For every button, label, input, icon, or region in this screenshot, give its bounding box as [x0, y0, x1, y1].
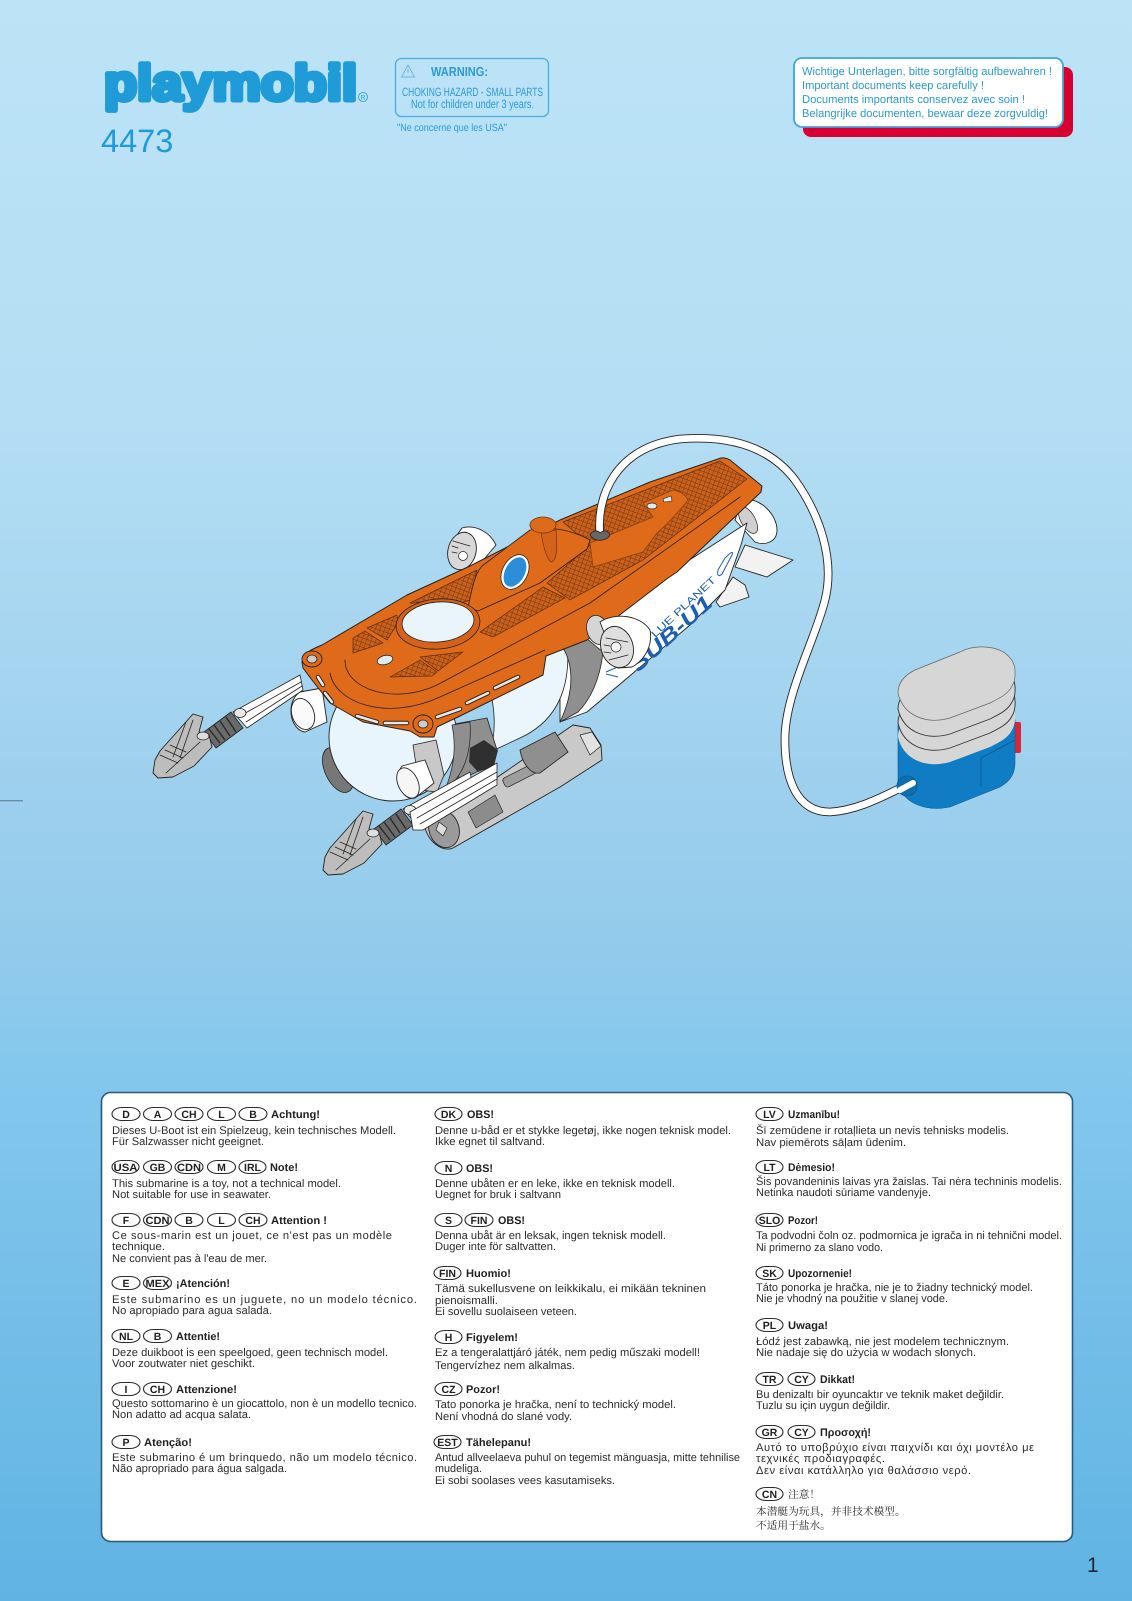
keep documents note: [794, 58, 1073, 137]
warning: Hungarian: Ez a tengeralattjáró játék, nem pedig műszaki modell!: [435, 1347, 700, 1359]
warning text: CHOKING HAZARD - SMALL PARTS: [402, 85, 543, 99]
conning tower: [468, 517, 590, 611]
warning: English: This submarine is a toy, not a technical model.: [112, 1178, 341, 1190]
warning: Hungarian: [435, 1330, 700, 1372]
warning: Lithuanian: Netinka naudoti sūriame vandenyje.: [756, 1187, 931, 1199]
tail thruster and fins: [716, 499, 793, 607]
warning: Latvian: Šī zemūdene ir rotaļlieta un nevis tehnisks modelis.: [756, 1124, 1009, 1137]
power cable: [599, 438, 905, 812]
warning: Slovenian: Ta podvodni čoln oz. podmornica je igrača in ni tehnični model.: [756, 1230, 1062, 1242]
warning: Spanish: ¡Atención!: [176, 1278, 230, 1290]
grey ring: [557, 633, 603, 722]
warning: Swedish: [435, 1214, 666, 1253]
warning: Spanish: No apropiado para agua salada.: [112, 1305, 272, 1317]
warning: Slovak: Nie je vhodný na použitie v slanej vode.: [756, 1293, 948, 1305]
warning text: Not for children under 3 years.: [411, 97, 534, 111]
warning: Slovak: [756, 1266, 1033, 1305]
periscope knob: [541, 530, 557, 562]
warning: French: [112, 1214, 392, 1265]
warning: Danish: OBS!: [467, 1109, 494, 1121]
warning: French: CDN: [146, 1215, 170, 1227]
keep documents note: Documents importants conservez avec soin !: [802, 94, 1025, 106]
warning: Hungarian: Figyelem!: [466, 1332, 518, 1344]
raised tail plate: [590, 490, 688, 567]
near arm and claw: [323, 763, 497, 875]
submarine illustration: [153, 458, 793, 875]
warning: English: Not suitable for use in seawater.: [112, 1189, 271, 1201]
warning: Estonian: mudeliga.: [435, 1463, 482, 1475]
blue base: [898, 720, 1015, 808]
warning: Latvian: Nav piemērots sāļam ūdenim.: [756, 1137, 906, 1149]
warning: Turkish: Tuzlu su için uygun değildir.: [756, 1400, 890, 1412]
warning heading: WARNING:: [431, 64, 488, 79]
warning: Portuguese: Atenção!: [144, 1437, 192, 1449]
orange deck: [302, 458, 762, 737]
warning: French: Attention !: [271, 1215, 327, 1227]
warning: Lithuanian: Šis povandeninis laivas yra žaislas. Tai nėra techninis modelis.: [756, 1175, 1062, 1188]
warning: German: D: [122, 1109, 130, 1121]
warning: Greek: τεχνικές προδιαγραφές.: [756, 1453, 885, 1465]
cable connector: [897, 776, 917, 796]
warning: French: F: [123, 1215, 130, 1227]
warning: Portuguese: Não apropriado para água salgada.: [112, 1463, 287, 1475]
warning: English: [112, 1160, 341, 1201]
warning: English: GB: [150, 1162, 166, 1174]
warning: Swedish: FIN: [471, 1215, 487, 1227]
warning: French: CH: [245, 1215, 261, 1227]
far arm and claw: [153, 675, 303, 778]
warning: German: Für Salzwasser nicht geeignet.: [112, 1136, 264, 1148]
warning: German: Dieses U-Boot ist ein Spielzeug, kein technisches Modell.: [112, 1125, 396, 1137]
side thruster: [583, 612, 651, 672]
warning: Polish: PL: [763, 1320, 777, 1332]
warning: Portuguese: Este submarino é um brinquedo, não um modelo técnico.: [112, 1452, 417, 1464]
cable grommet: [590, 531, 610, 540]
warning: Swedish: Duger inte för saltvatten.: [435, 1241, 556, 1253]
logo: playmobil: playmobil: [104, 55, 357, 111]
rear thruster behind tower: [444, 527, 496, 573]
grey lid layers: [898, 691, 1015, 764]
warning: Turkish: Bu denizaltı bir oyuncaktır ve teknik maket değildir.: [756, 1389, 1004, 1401]
warning: Norwegian: Denne ubåten er en leke, ikke en teknisk modell.: [435, 1178, 675, 1190]
warning: Finnish: Huomio!: [466, 1268, 511, 1280]
warning: Lithuanian: [756, 1160, 1062, 1199]
warning: Norwegian: Uegnet for bruk i saltvann: [435, 1189, 561, 1201]
warning: Italian: CH: [150, 1384, 165, 1396]
warning: Italian: Questo sottomarino è un giocattolo, non è un modello tecnico.: [112, 1398, 417, 1410]
warning: Greek: Δεν είναι κατάλληλο για θαλάσσιο νερό.: [756, 1465, 971, 1477]
warning: English: M: [217, 1162, 226, 1174]
warning: Swedish: Denna ubåt är en leksak, ingen teknisk modell.: [435, 1230, 666, 1242]
warning: Swedish: S: [445, 1215, 452, 1227]
battery box: [897, 647, 1021, 808]
lower headlight: [392, 760, 434, 802]
warning: Spanish: Este submarino es un juguete, no un modelo técnico.: [112, 1294, 417, 1306]
warning: Chinese: [756, 1488, 906, 1532]
warning: Latvian: LV: [763, 1109, 776, 1121]
white stern hull: LUE PLANET: [650, 575, 718, 640]
warning: German: A: [154, 1109, 162, 1121]
warning: Dutch: Attentie!: [176, 1331, 220, 1343]
warning: Finnish: Tämä sukellusvene on leikkikalu, ei mikään tekninen: [435, 1283, 706, 1295]
warning: Italian: [112, 1382, 417, 1421]
warning: English: Note!: [270, 1162, 298, 1174]
centre white hull section: [484, 640, 568, 752]
warning: Finnish: [434, 1266, 706, 1318]
front wheel: [316, 743, 360, 797]
warning: Estonian: Tähelepanu!: [466, 1437, 531, 1449]
warning: Czech: [435, 1382, 676, 1423]
warning: Polish: Nie nadaje się do użycia w wodach słonych.: [756, 1347, 976, 1359]
warning: Portuguese: [112, 1436, 417, 1475]
deck ears: [302, 651, 322, 667]
hull lettering: SUB-U1: [626, 591, 717, 677]
warning: German: [112, 1108, 396, 1148]
warning: Italian: Attenzione!: [176, 1384, 237, 1396]
warning: Spanish: E: [122, 1278, 130, 1290]
warning: Chinese: 本潜艇为玩具，并非技术模型。: [756, 1506, 906, 1518]
warning box: [396, 58, 548, 116]
warning: Dutch: B: [154, 1331, 162, 1343]
warning: Spanish: MEX: [146, 1278, 170, 1290]
warning: Chinese: 注意！: [788, 1488, 820, 1501]
deck inner step: [330, 497, 740, 708]
warning: Turkish: [756, 1372, 1004, 1412]
warning: Spanish: [112, 1276, 417, 1317]
warning: Czech: Tato ponorka je hračka, není to technický model.: [435, 1399, 676, 1411]
warning: Dutch: Voor zoutwater niet geschikt.: [112, 1358, 255, 1370]
warning: Turkish: CY: [794, 1374, 809, 1386]
warning: Danish: Denne u-båd er et stykke legetøj, ikke nogen teknisk model.: [435, 1125, 731, 1137]
warning: Slovenian: [756, 1214, 1062, 1254]
logo: playmobil: R: [361, 94, 366, 102]
keep documents note: Belangrijke documenten, bewaar deze zorgvuldig!: [802, 108, 1048, 120]
warning: Hungarian: H: [445, 1332, 452, 1344]
warning: Czech: Není vhodná do slané vody.: [435, 1411, 572, 1423]
warning: Norwegian: N: [445, 1163, 452, 1175]
warning: English: IRL: [244, 1162, 262, 1174]
warning: Portuguese: P: [122, 1437, 130, 1449]
keep documents note: Wichtige Unterlagen, bitte sorgfältig aufbewahren !: [802, 66, 1052, 78]
pontoon skid: [424, 725, 602, 852]
warning: German: Achtung!: [271, 1109, 320, 1121]
warning: Polish: [756, 1318, 1009, 1359]
warning: French: technique.: [112, 1241, 165, 1253]
warning: Finnish: Ei sovellu suolaiseen veteen.: [435, 1306, 577, 1318]
warning: Slovak: Upozornenie!: [788, 1268, 852, 1280]
warning: Danish: Ikke egnet til saltvand.: [435, 1136, 545, 1148]
warning: Turkish: TR: [762, 1374, 777, 1386]
warning: Swedish: OBS!: [498, 1215, 525, 1227]
warning: French: B: [185, 1215, 193, 1227]
warning: Greek: [756, 1426, 1034, 1477]
warning: Estonian: Ei sobi soolases vees kasutamiseks.: [435, 1475, 615, 1487]
warning: Polish: Uwaga!: [788, 1320, 828, 1332]
USA note: "Ne concerne que les USA": [397, 122, 507, 134]
warning: German: B: [249, 1109, 257, 1121]
panel: warnings in many languages: [102, 1092, 1072, 1542]
warning: German: L: [218, 1109, 225, 1121]
front dome: [329, 673, 457, 801]
warning: Lithuanian: LT: [763, 1162, 776, 1174]
upper headlight: [287, 688, 327, 733]
warning: German: CH: [181, 1109, 197, 1121]
keep documents note: Important documents keep carefully !: [802, 80, 984, 92]
warning: English: USA: [114, 1162, 138, 1174]
white stern hull: [560, 523, 747, 722]
warning: Greek: Προσοχή!: [820, 1427, 871, 1439]
rim slots: [318, 677, 518, 723]
warning: Czech: Pozor!: [466, 1384, 500, 1396]
warning: Slovak: Táto ponorka je hračka, nie je to žiadny technický model.: [756, 1282, 1033, 1294]
warning: Turkish: Dikkat!: [820, 1374, 855, 1386]
icon: warning triangle: [402, 65, 414, 77]
warning: Slovak: SK: [762, 1268, 777, 1280]
tower emblem: [497, 552, 533, 592]
warning: Greek: Αυτό το υποβρύχιο είναι παιχνίδι και όχι μοντέλο με: [756, 1442, 1034, 1454]
warning: Italian: Non adatto ad acqua salata.: [112, 1409, 251, 1421]
warning: Greek: CY: [794, 1427, 809, 1439]
warning: Greek: GR: [762, 1427, 778, 1439]
warning: French: Ne convient pas à l'eau de mer.: [112, 1253, 267, 1265]
warning: Slovenian: SLO: [759, 1215, 780, 1227]
warning: Norwegian: [435, 1162, 675, 1201]
warning: English: CDN: [177, 1162, 201, 1174]
warning: Norwegian: OBS!: [466, 1163, 493, 1175]
warning: Estonian: [434, 1436, 740, 1487]
warning text: [402, 85, 543, 111]
arm bracket and motor: [413, 740, 498, 792]
warning: Finnish: FIN: [439, 1268, 456, 1280]
warning: Slovenian: Ni primerno za slano vodo.: [756, 1242, 883, 1254]
mesh panels: [353, 461, 747, 677]
warning: Estonian: EST: [437, 1437, 458, 1449]
warning: Chinese: CN: [762, 1489, 777, 1501]
warning: Dutch: [112, 1330, 388, 1370]
product number: 4473: [101, 123, 173, 159]
warning: French: Ce sous-marin est un jouet, ce n'est pas un modèle: [112, 1230, 392, 1242]
warning: Dutch: Deze duikboot is een speelgoed, geen technisch model.: [112, 1347, 388, 1359]
warning: Estonian: Antud allveelaeva puhul on tegemist mänguasja, mitte tehnilise: [435, 1452, 740, 1464]
warning: French: L: [218, 1215, 225, 1227]
deck hatch dome: [394, 595, 482, 653]
warning: Dutch: NL: [119, 1331, 134, 1343]
warning: Czech: CZ: [442, 1384, 456, 1396]
warning: Polish: Łódź jest zabawką, nie jest modelem technicznym.: [756, 1336, 1009, 1348]
warning: Lithuanian: Dėmesio!: [788, 1162, 835, 1174]
warning: Danish: DK: [441, 1109, 456, 1121]
page number: 1: [1087, 1554, 1099, 1577]
warning: Slovenian: Pozor!: [788, 1215, 818, 1227]
warning: Chinese: 不适用于盐水。: [756, 1519, 831, 1532]
red switch: [1013, 722, 1021, 753]
ring over dome: [445, 722, 470, 790]
warning: Danish: [435, 1108, 731, 1148]
warning: Italian: I: [125, 1384, 128, 1396]
deck hole: [376, 654, 394, 666]
warning: Finnish: pienoismalli.: [435, 1295, 498, 1307]
warning: Latvian: Uzmanību!: [788, 1109, 840, 1121]
warning: Hungarian: Tengervízhez nem alkalmas.: [435, 1360, 575, 1372]
warning: Latvian: [756, 1108, 1009, 1149]
